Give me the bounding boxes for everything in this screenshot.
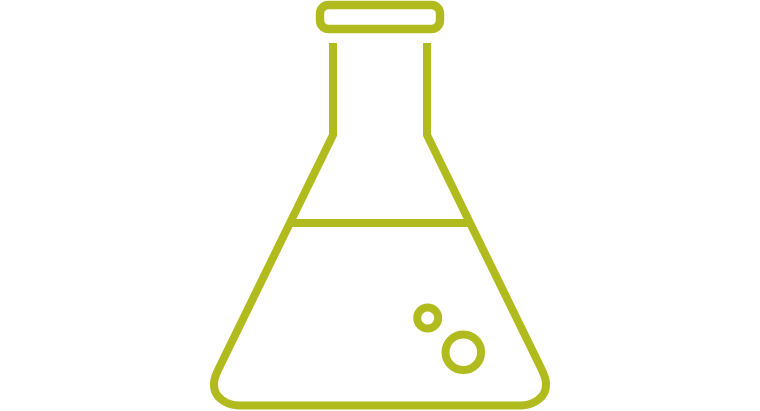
- liquid level line: [288, 219, 472, 227]
- large bubble: [446, 334, 481, 370]
- small bubble: [417, 308, 438, 328]
- flask body: [214, 43, 546, 406]
- flask cap: [320, 5, 440, 29]
